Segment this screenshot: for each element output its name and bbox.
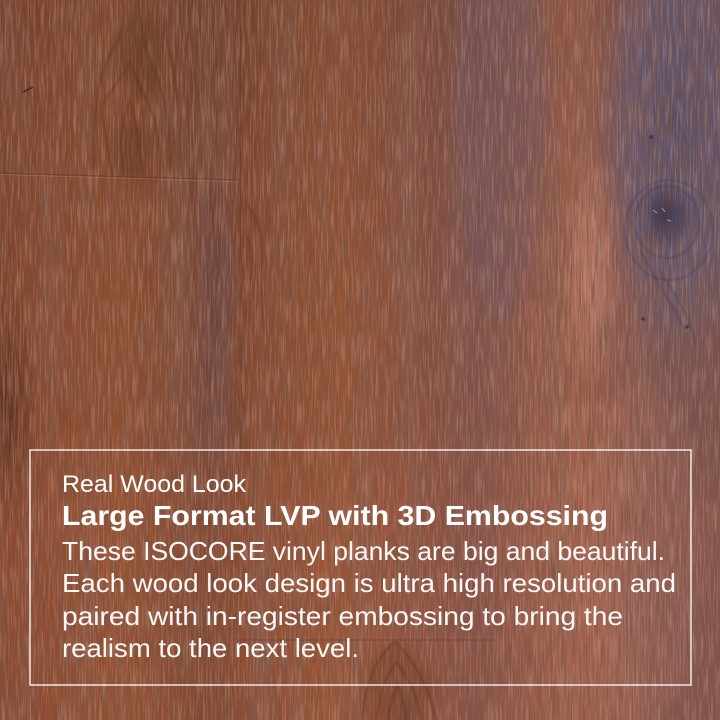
text block (62, 471, 676, 663)
body paragraph: paired with in-register embossing to bring the (62, 601, 623, 631)
grain swirl by seam (244, 200, 263, 330)
dark plank streak near seam (198, 180, 236, 460)
cathedral grain upper left (94, 0, 180, 175)
heading: Large Format LVP with 3D Embossing (62, 500, 608, 531)
body paragraph (62, 536, 676, 663)
body paragraph: realism to the next level. (62, 633, 359, 663)
body paragraph: These ISOCORE vinyl planks are big and beautiful. (62, 536, 665, 566)
purple grey stain around knot (455, 0, 720, 370)
body paragraph: Each wood look design is ultra high resolution and (62, 568, 676, 598)
lighter pink highlight (560, 135, 624, 395)
dark patch on left edge (0, 290, 38, 530)
knot right (625, 135, 713, 345)
text panel frame (30, 450, 691, 685)
eyebrow: Real Wood Look: Real Wood Look (62, 471, 247, 498)
plank seams (0, 0, 495, 640)
cathedral grain bottom centre (362, 642, 436, 720)
